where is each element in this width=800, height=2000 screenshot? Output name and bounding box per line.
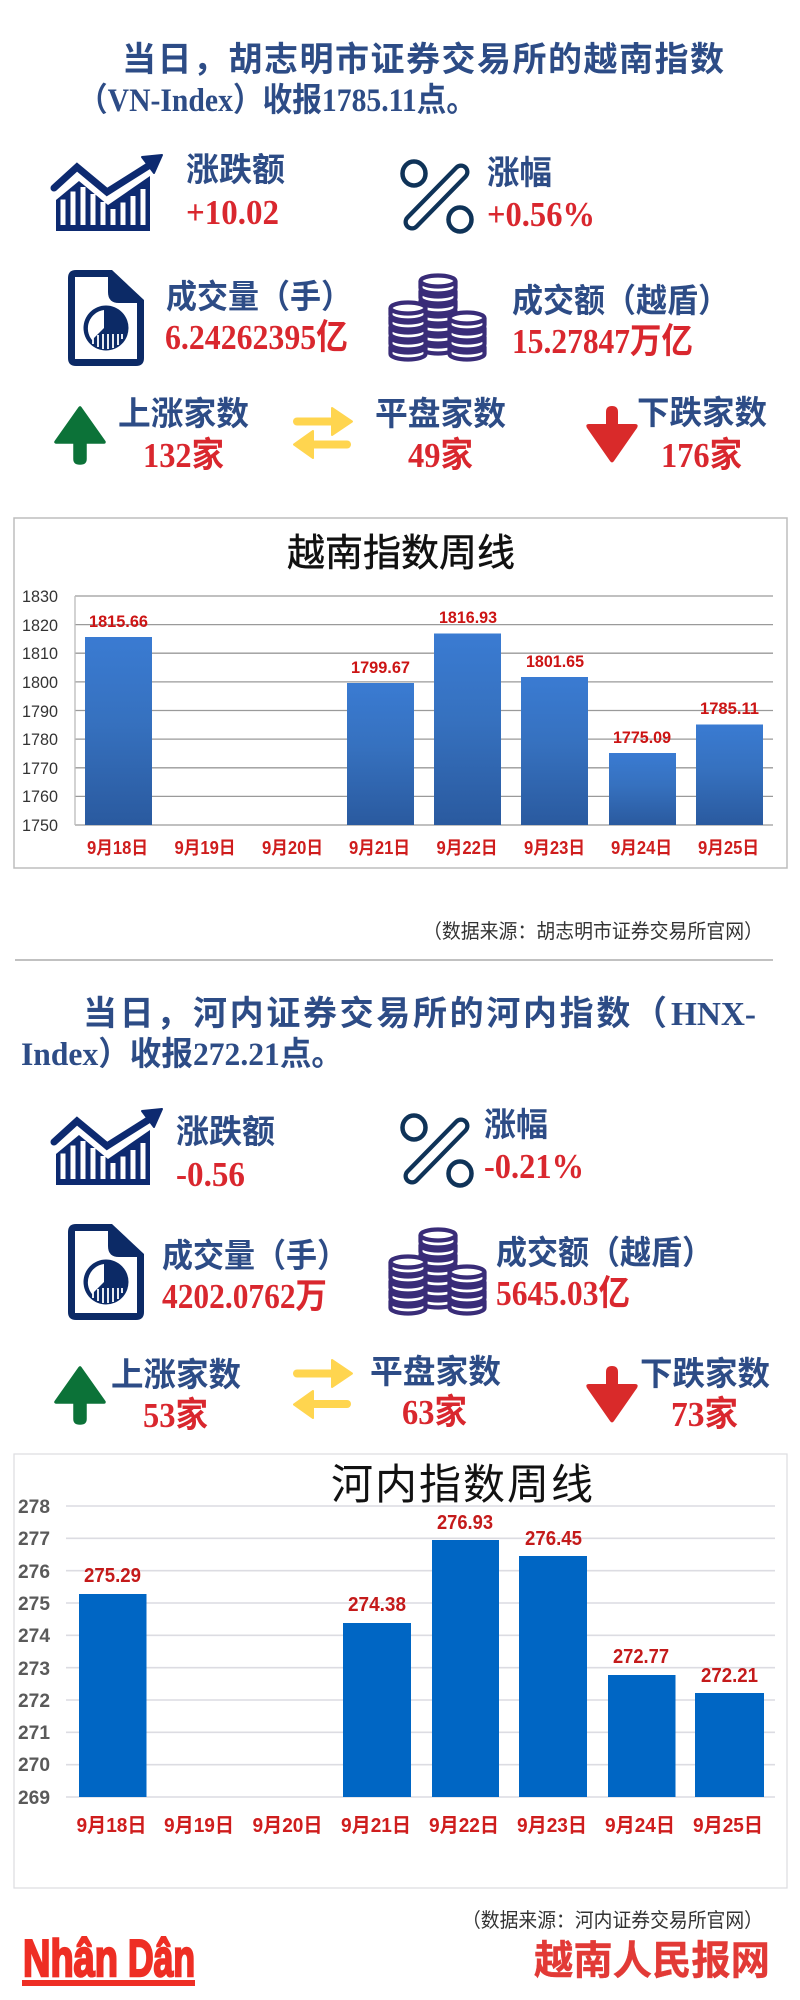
stat: advancers — [118, 395, 249, 475]
panel: HNX-Index weekly chart: 276.45 — [525, 1528, 582, 1550]
panel: HNX-Index weekly chart: 270 — [18, 1755, 50, 1776]
stat: change percent: -0.21% — [484, 1147, 584, 1186]
panel: HNX-Index weekly chart: 275 — [18, 1594, 50, 1615]
panel: HNX-Index weekly chart: 272 — [18, 1691, 50, 1712]
panel: HNX-Index weekly chart — [14, 1454, 787, 1888]
heading: VN-Index summary: 当日，胡志明市证券交易所的越南指数 — [122, 41, 724, 79]
icon: coins — [390, 1230, 484, 1314]
panel: HNX-Index weekly chart: 9月19日 — [164, 1815, 234, 1837]
panel: VN-Index weekly chart: 1800 — [22, 673, 58, 692]
stat: unchanged — [375, 395, 506, 475]
icon: document — [68, 1224, 144, 1320]
panel: HNX-Index weekly chart: 273 — [18, 1659, 50, 1680]
stat: advancers: 上涨家数 — [118, 395, 249, 432]
stat: change amount: 涨跌额 — [186, 151, 285, 188]
panel: VN-Index weekly chart: 1760 — [22, 787, 58, 806]
stat: decliners: 下跌家数 — [637, 394, 767, 431]
panel: HNX-Index weekly chart: 272.21 — [701, 1665, 758, 1687]
stat: decliners: 176家 — [661, 436, 742, 475]
stat: decliners: 73家 — [671, 1395, 738, 1434]
icon: down arrow — [586, 406, 638, 462]
panel: VN-Index weekly chart: 1775.09 — [613, 728, 671, 747]
icon: document — [68, 270, 144, 366]
panel: HNX-Index weekly chart: 272.77 — [613, 1646, 669, 1668]
chart title: 越南指数周线 — [287, 533, 515, 575]
panel: VN-Index weekly chart: 9月25日 — [698, 838, 759, 858]
stat: change amount: -0.56 — [176, 1155, 245, 1194]
stat: change amount — [176, 1113, 275, 1194]
panel: HNX-Index weekly chart: 9月21日 — [341, 1815, 411, 1837]
stat: change amount: +10.02 — [186, 193, 279, 232]
panel: HNX-Index weekly chart: 9月23日 — [517, 1815, 587, 1837]
panel: VN-Index weekly chart: 1810 — [22, 644, 58, 663]
stat: advancers — [111, 1356, 241, 1435]
panel: VN-Index weekly chart: 9月21日 — [349, 838, 410, 858]
icon: percent — [402, 162, 472, 232]
heading: HNX-Index summary: 当日，河内证券交易所的河内指数（ — [83, 995, 667, 1033]
stat: unchanged: 49家 — [408, 436, 473, 475]
stat: decliners: 下跌家数 — [640, 1355, 770, 1392]
source note: HNX-Index: （数据来源：河内证券交易所官网） — [462, 1909, 763, 1932]
stat: turnover: 成交额（越盾） — [496, 1234, 713, 1271]
logo: Nhan Dan: Dân — [128, 1930, 195, 1988]
stat: advancers: 132家 — [143, 436, 224, 475]
logo: Nhan Dan: Nhân — [23, 1930, 118, 1988]
stat: change percent: 涨幅 — [487, 154, 552, 191]
panel: HNX-Index weekly chart: 9月22日 — [429, 1815, 499, 1837]
stat: volume — [165, 278, 352, 357]
panel: HNX-Index weekly chart: 269 — [18, 1788, 50, 1809]
stat: change percent — [487, 154, 595, 234]
source note: VN-Index: （数据来源：胡志明市证券交易所官网） — [423, 920, 763, 943]
panel: VN-Index weekly chart: 1801.65 — [526, 652, 584, 671]
panel: VN-Index weekly chart: 1815.66 — [89, 612, 148, 631]
stat: volume: 4202.0762万 — [162, 1277, 327, 1316]
panel: VN-Index weekly chart: 1820 — [22, 616, 58, 635]
stat: decliners — [637, 394, 767, 475]
stat: turnover: 5645.03亿 — [496, 1274, 630, 1313]
panel: HNX-Index weekly chart: 275.29 — [84, 1565, 141, 1587]
heading: HNX-Index summary: Index）收报272.21点。 — [21, 1036, 343, 1073]
panel: HNX-Index weekly chart: 274.38 — [348, 1594, 406, 1616]
panel: HNX-Index weekly chart: 278 — [18, 1497, 50, 1518]
stat: turnover — [512, 282, 729, 361]
stat: decliners — [640, 1355, 770, 1434]
stat: volume — [162, 1237, 348, 1316]
stat: change percent — [484, 1106, 584, 1186]
icon: up arrow — [56, 1368, 104, 1423]
stat: advancers: 53家 — [143, 1396, 208, 1435]
stat: unchanged: 63家 — [402, 1393, 467, 1432]
logo text: Vietnam People's Daily: 越南人民报网 — [534, 1939, 770, 1983]
heading: HNX-Index summary: HNX- — [671, 996, 756, 1033]
stat: unchanged: 平盘家数 — [375, 395, 506, 432]
panel: HNX-Index weekly chart: 277 — [18, 1529, 50, 1550]
panel: VN-Index weekly chart — [14, 518, 787, 868]
icon: rising chart — [54, 155, 162, 231]
panel: VN-Index weekly chart: 9月18日 — [87, 838, 148, 858]
icon: percent — [402, 1116, 472, 1186]
panel: HNX-Index weekly chart: 274 — [18, 1626, 50, 1647]
stat: turnover — [496, 1234, 713, 1313]
icon: coins — [390, 276, 484, 360]
panel: HNX-Index weekly chart: 276.93 — [437, 1512, 493, 1534]
panel: HNX-Index weekly chart: 9月20日 — [252, 1815, 322, 1837]
panel: HNX-Index weekly chart: 276 — [18, 1562, 50, 1583]
panel: VN-Index weekly chart: 1750 — [22, 816, 58, 835]
panel: VN-Index weekly chart: 9月20日 — [262, 838, 323, 858]
panel: VN-Index weekly chart: 1816.93 — [439, 608, 497, 627]
chart title: 河内指数周线 — [331, 1461, 593, 1508]
stat: change amount — [186, 151, 285, 232]
panel: VN-Index weekly chart: 1780 — [22, 730, 58, 749]
stat: volume: 成交量（手） — [162, 1237, 348, 1274]
stat: unchanged: 平盘家数 — [370, 1353, 501, 1390]
stat: turnover: 成交额（越盾） — [512, 282, 729, 319]
stat: turnover: 15.27847万亿 — [512, 322, 693, 361]
heading: HNX-Index summary — [21, 995, 756, 1073]
panel: HNX-Index weekly chart: 9月24日 — [605, 1815, 675, 1837]
panel: VN-Index weekly chart: 1785.11 — [700, 699, 759, 718]
panel: VN-Index weekly chart: 1799.67 — [351, 658, 410, 677]
icon: swap arrows — [293, 408, 352, 458]
panel: VN-Index weekly chart: 1830 — [22, 587, 58, 606]
icon: swap arrows — [293, 1360, 352, 1418]
panel: HNX-Index weekly chart: 271 — [18, 1723, 50, 1744]
stat: unchanged — [370, 1353, 501, 1432]
panel: VN-Index weekly chart: 9月23日 — [524, 838, 585, 858]
icon: rising chart — [54, 1109, 162, 1185]
heading: VN-Index summary: （VN-Index）收报1785.11点。 — [78, 82, 476, 119]
panel: VN-Index weekly chart: 9月22日 — [436, 838, 498, 858]
stat: change percent: 涨幅 — [484, 1106, 548, 1143]
panel: VN-Index weekly chart: 9月24日 — [611, 838, 672, 858]
stat: volume: 成交量（手） — [166, 278, 352, 315]
icon: down arrow — [586, 1366, 638, 1422]
icon: up arrow — [56, 408, 104, 463]
panel: HNX-Index weekly chart: 9月18日 — [76, 1815, 146, 1837]
stat: change percent: +0.56% — [487, 195, 595, 234]
stat: change amount: 涨跌额 — [176, 1113, 275, 1150]
panel: VN-Index weekly chart: 9月19日 — [174, 838, 236, 858]
panel: HNX-Index weekly chart: 9月25日 — [693, 1815, 763, 1837]
stat: volume: 6.24262395亿 — [165, 318, 348, 357]
panel: VN-Index weekly chart: 1770 — [22, 759, 58, 778]
heading: VN-Index summary — [78, 41, 724, 119]
stat: advancers: 上涨家数 — [111, 1356, 241, 1393]
panel: VN-Index weekly chart: 1790 — [22, 702, 58, 721]
